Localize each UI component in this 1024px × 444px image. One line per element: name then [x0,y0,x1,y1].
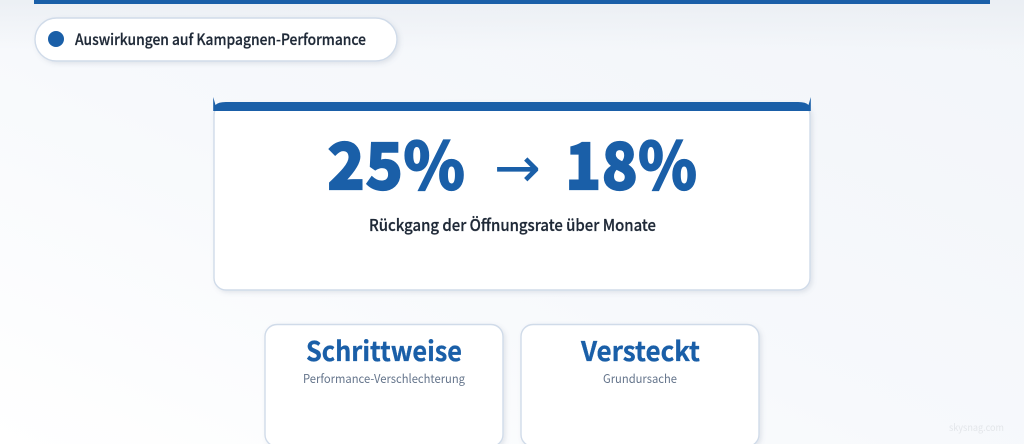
watermark: skysnag.com [949,420,1004,434]
panel: open rate decline [213,97,811,290]
panel top accent [213,97,811,111]
hidden title: Versteckt [580,330,700,369]
section heading pill [35,18,397,61]
stat: 25% to 18%: 25% [327,114,465,208]
gradual subtitle: Performance-Verschlechterung [303,370,465,387]
stat: 25% to 18% [327,114,697,208]
gradual title: Schrittweise [306,330,462,369]
icon: heading dot [48,31,64,47]
arrow: → [494,136,541,201]
heading text: Auswirkungen auf Kampagnen-Performance [75,28,366,50]
panel: hidden [521,324,759,444]
top accent bar [34,0,990,4]
stat: 25% to 18%: 18% [565,114,697,208]
stat caption: Rückgang der Öffnungsrate über Monate [369,212,656,236]
panel: gradual [265,324,503,444]
hidden subtitle: Grundursache [603,370,677,387]
